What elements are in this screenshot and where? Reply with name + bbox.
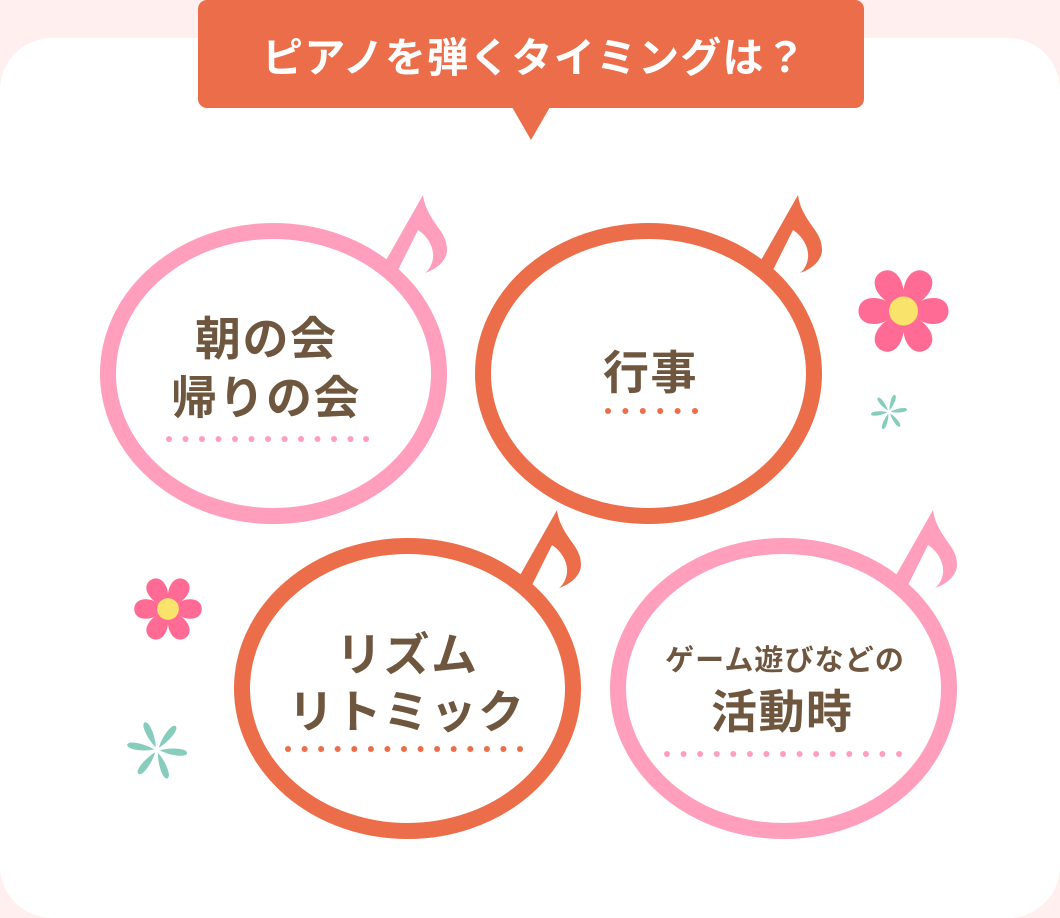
- title banner: [198, 0, 864, 140]
- icon: large teal flower: [127, 721, 187, 780]
- bubble: rhythm and eurhythmics: リズム: [336, 629, 478, 681]
- bubble: morning and closing meetings: 帰りの会: [171, 372, 361, 424]
- bubble: activities such as games: 活動時: [711, 686, 854, 738]
- bubble: school events: 行事: [603, 347, 698, 399]
- icon: large pink flower: [858, 266, 948, 356]
- bubble: activities such as games: ゲーム遊びなどの: [665, 644, 905, 677]
- icon: small pink flower: [134, 575, 202, 643]
- bubble: school events: [483, 195, 822, 516]
- bubble: activities such as games: [618, 510, 957, 831]
- bubble: morning and closing meetings: 朝の会: [195, 313, 338, 365]
- title banner: ピアノを弾くタイミングは？: [262, 35, 807, 81]
- icon: small teal flower: [871, 394, 907, 430]
- bubble: morning and closing meetings: [108, 195, 447, 516]
- bubble: rhythm and eurhythmics: リトミック: [288, 686, 526, 738]
- bubble: rhythm and eurhythmics: [242, 510, 581, 831]
